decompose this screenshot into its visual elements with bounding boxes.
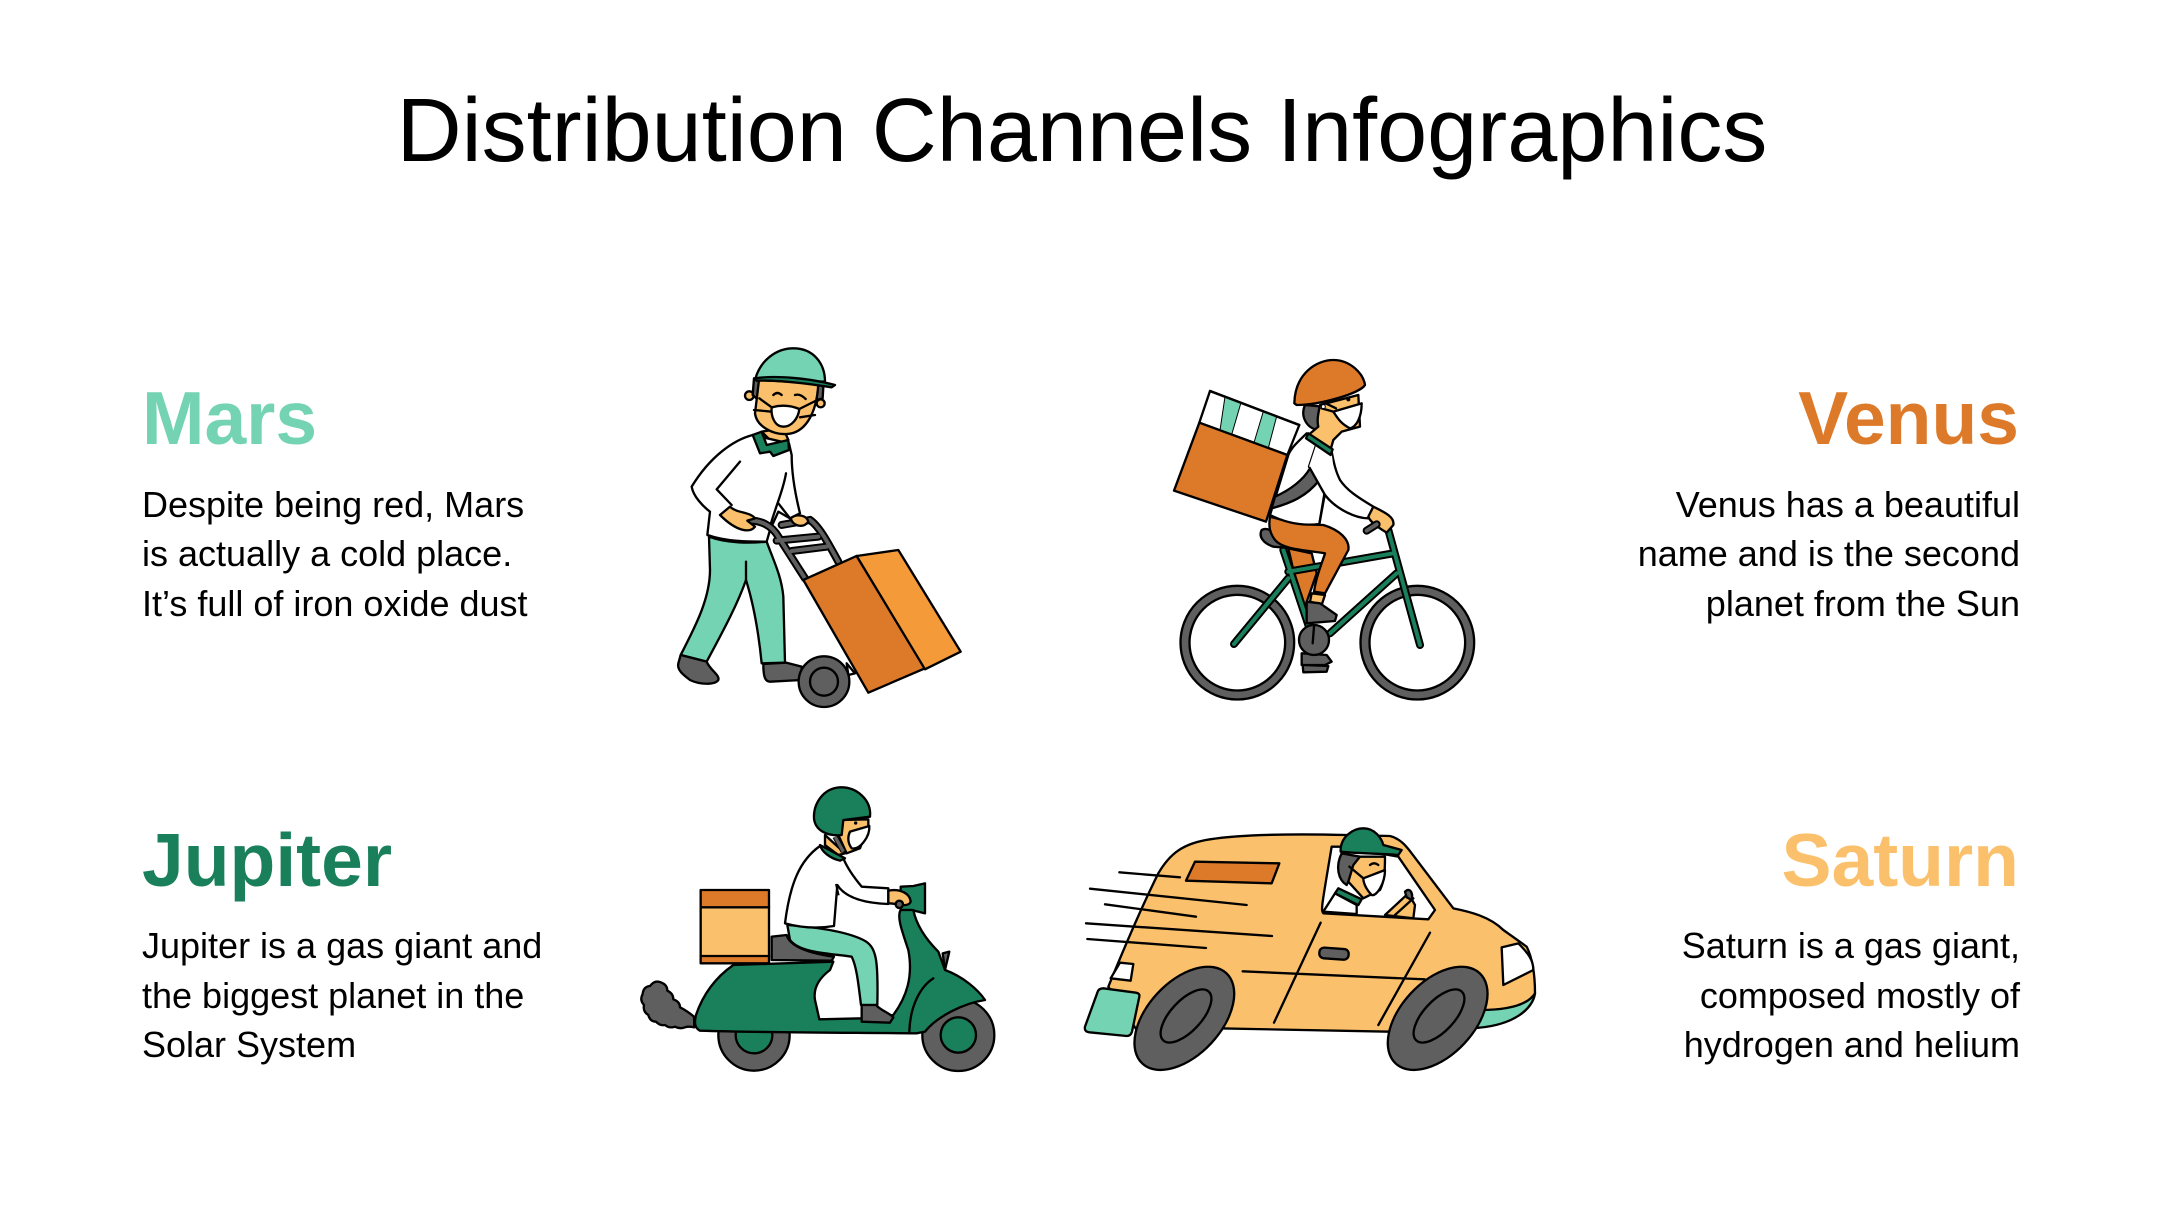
text: Venus description: Venus has a beautiful <box>1676 484 2020 524</box>
icon: worker pushing hand truck <box>678 348 961 707</box>
text: Jupiter description <box>142 925 542 1065</box>
text: Mars description: It’s full of iron oxide dust <box>142 583 528 624</box>
text: Saturn description: Saturn is a gas giant, <box>1682 925 2020 966</box>
icon: scooter rider <box>641 787 994 1071</box>
text: Saturn description: hydrogen and helium <box>1684 1024 2020 1065</box>
icon: cyclist with delivery box <box>1174 360 1470 695</box>
icon: delivery van <box>1085 828 1535 1088</box>
text: Venus description: planet from the Sun <box>1706 583 2020 624</box>
text: Jupiter description: Solar System <box>142 1024 356 1065</box>
text: Mars description <box>142 484 528 624</box>
heading: Venus: Venus <box>1798 376 2019 460</box>
text: Mars description: is actually a cold place. <box>142 533 512 574</box>
text: Jupiter description: Jupiter is a gas giant and <box>142 925 542 966</box>
text: Mars description: Despite being red, Mars <box>142 484 524 524</box>
heading: Jupiter: Jupiter <box>142 818 392 902</box>
heading: Mars: Mars <box>142 376 317 460</box>
title: Distribution Channels Infographics <box>397 81 1767 181</box>
text: Venus description: name and is the second <box>1638 533 2020 574</box>
text: Saturn description: composed mostly of <box>1700 975 2020 1016</box>
text: Jupiter description: the biggest planet in the <box>142 975 524 1016</box>
heading: Saturn: Saturn <box>1781 818 2019 902</box>
text: Saturn description <box>1682 925 2020 1065</box>
text: Venus description <box>1638 484 2020 624</box>
